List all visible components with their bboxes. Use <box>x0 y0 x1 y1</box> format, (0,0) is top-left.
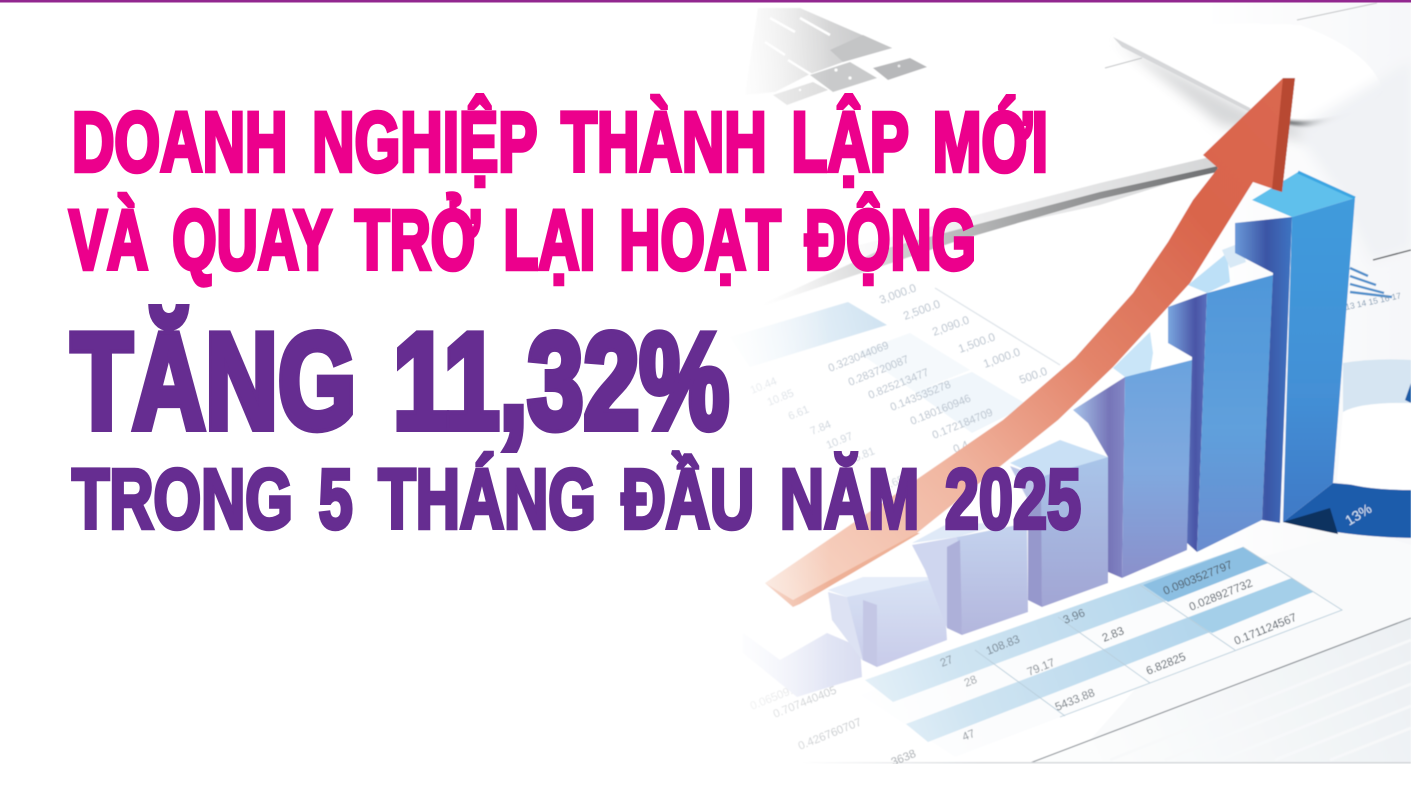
bar 1 <box>743 633 862 697</box>
title block <box>69 95 1081 546</box>
icon: computer mouse <box>1105 3 1383 140</box>
upper table in background: 1,500.0 <box>957 331 997 356</box>
lower table in foreground: 27 <box>939 654 955 670</box>
upper table in background: 0.4 <box>952 439 970 456</box>
upper table in background: 7.84 <box>809 419 833 438</box>
bar 6 <box>1168 243 1273 552</box>
lower table in foreground: 28 <box>963 674 979 690</box>
upper table in background: 0.825213477 <box>867 367 931 402</box>
lower table in foreground: 5433.88 <box>1054 687 1097 714</box>
icon: donut chart: 13% <box>1342 500 1374 529</box>
chart: rising 3D bars <box>743 172 1355 697</box>
lower table in foreground: 0.707440405 <box>772 684 838 721</box>
upper table in background: 1,000.0 <box>982 346 1022 371</box>
lower table in foreground: 0.426760707 <box>797 716 863 753</box>
top border line <box>0 0 1411 2</box>
lower table in foreground: 0.0650911 <box>749 682 803 713</box>
bar 2 <box>828 577 947 667</box>
lower table in foreground: 79.17 <box>1026 657 1057 679</box>
lower table in foreground: 47 <box>961 728 977 744</box>
bar 4 <box>1010 440 1108 607</box>
upper table in background: 0.180160946 <box>909 393 973 428</box>
bar 5 <box>1073 332 1192 578</box>
upper table in background: 10.44 <box>749 375 779 397</box>
icon: keyboard keys <box>745 8 927 105</box>
upper table in background: 3,000.0 <box>878 282 918 307</box>
lower table in foreground: 3.96 <box>1062 607 1087 627</box>
upper table in background: 10.85 <box>766 387 796 409</box>
white strip below the photo <box>0 764 1411 794</box>
left fade over the photo <box>700 0 830 763</box>
tablet edge <box>745 157 1218 312</box>
lower table in foreground: 2.83 <box>1101 625 1126 645</box>
lower table in foreground <box>749 547 1342 769</box>
upper table in background: 6.61 <box>787 404 811 423</box>
lower right sheet and paper edge <box>800 530 1411 764</box>
lower table in foreground: 0.0903527797 <box>1162 559 1234 598</box>
icon: donut chart <box>1283 359 1411 538</box>
title line 2: VÀ QUAY TRỞ LẠI HOẠT ĐỘNG <box>69 193 976 287</box>
upper table in background: 0.283720087 <box>847 354 911 389</box>
upper table in background: 10.97 <box>825 430 855 452</box>
upper table in background: 0.323044069 <box>827 340 891 375</box>
bar 3 <box>912 522 1028 635</box>
mini column legend <box>1344 268 1402 312</box>
upper right paper <box>1295 60 1411 262</box>
upper table in background: 7.65 <box>882 474 906 493</box>
lower table in foreground: 6.82825 <box>1145 651 1188 678</box>
upper table in background: 0.172184709 <box>931 407 995 442</box>
lower table in foreground: 0.171124567 <box>1233 612 1299 648</box>
lower table in foreground: 3638 <box>890 748 918 769</box>
upper table in background: 0.143535278 <box>889 379 953 414</box>
upper table in background: 15.81 <box>847 445 877 467</box>
mini column legend: 13 14 15 16 17 <box>1344 290 1402 312</box>
lower table in foreground: 108.83 <box>985 633 1022 658</box>
upper table in background: 500.0 <box>1018 366 1049 387</box>
arrow rising to the top right <box>765 78 1295 607</box>
headline figure: TĂNG 11,32% <box>71 305 729 457</box>
bar 7 <box>1235 172 1355 523</box>
upper table in background <box>730 282 1060 493</box>
upper table in background: 2,090.0 <box>931 314 971 339</box>
upper table in background: 2,500.0 <box>902 298 942 323</box>
lower table in foreground: 0.028927732 <box>1188 577 1254 614</box>
background photo: desk with documents <box>700 0 1411 769</box>
